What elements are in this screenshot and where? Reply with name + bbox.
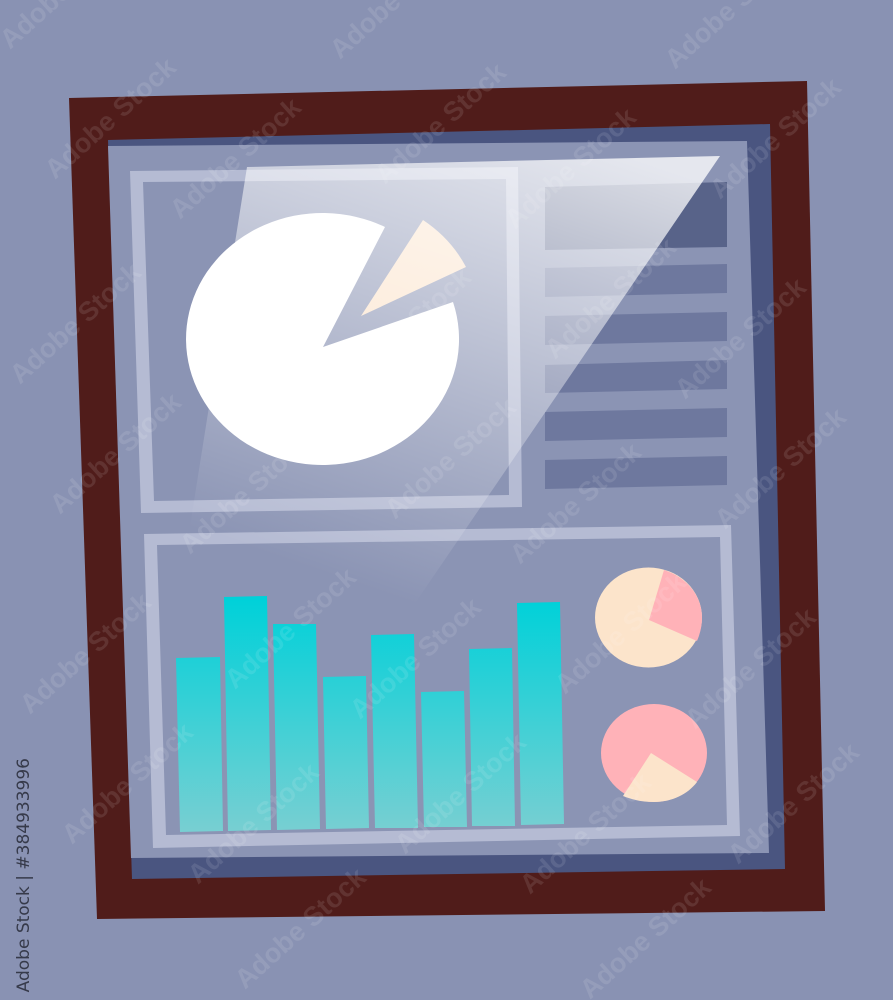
watermarks: Adobe Stock bbox=[549, 566, 692, 699]
watermarks: Adobe Stock bbox=[174, 426, 317, 559]
row 5 bbox=[545, 408, 727, 441]
watermarks: Adobe Stock bbox=[379, 391, 522, 524]
watermarks: Adobe Stock bbox=[504, 436, 647, 569]
watermarks: Adobe Stock bbox=[219, 561, 362, 694]
frame bbox=[69, 81, 825, 919]
watermarks: Adobe Stock bbox=[44, 386, 187, 519]
watermarks: Adobe Stock bbox=[499, 101, 642, 234]
watermarks: Adobe Stock bbox=[14, 586, 157, 719]
watermarks: Adobe Stock bbox=[369, 56, 512, 189]
bar chart bbox=[176, 596, 564, 832]
row 6 bbox=[545, 456, 727, 489]
watermarks: Adobe Stock bbox=[669, 271, 812, 404]
watermarks: Adobe Stock bbox=[4, 256, 147, 389]
watermarks: Adobe Stock bbox=[722, 736, 865, 869]
panel: pie chart bbox=[130, 167, 522, 513]
watermarks: Adobe Stock bbox=[679, 601, 822, 734]
watermarks: Adobe Stock bbox=[514, 766, 657, 899]
panel: bar chart and small pies bbox=[144, 525, 740, 848]
watermarks: Adobe Stock bbox=[164, 91, 307, 224]
watermarks: Adobe Stock bbox=[389, 726, 532, 859]
panel: list rows bbox=[545, 182, 727, 489]
glass reflection bbox=[172, 156, 720, 640]
board shadow bbox=[108, 124, 785, 879]
small pie chart: top bbox=[595, 568, 702, 668]
watermarks: Adobe Stock bbox=[344, 591, 487, 724]
large pie chart body bbox=[186, 213, 459, 465]
watermarks: Adobe Stock bbox=[334, 261, 477, 394]
row 3 bbox=[545, 312, 727, 345]
bottom panel border bbox=[144, 525, 740, 848]
watermarks: Adobe Stock bbox=[39, 51, 182, 184]
watermarks: Adobe Stock bbox=[56, 716, 199, 849]
watermarks: Adobe Stock bbox=[539, 231, 682, 364]
watermarks: Adobe Stock bbox=[704, 71, 847, 204]
small pie chart: bottom bbox=[601, 704, 707, 802]
watermarks: Adobe Stock bbox=[209, 221, 352, 354]
pie chart border bbox=[130, 167, 522, 513]
watermarks: Adobe Stock bbox=[709, 401, 852, 534]
row 1 bbox=[545, 182, 727, 250]
pie chart slice bbox=[361, 220, 466, 316]
row 2 bbox=[545, 264, 727, 297]
watermarks: Adobe Stock bbox=[229, 861, 372, 994]
stock id label: Adobe Stock | #384933996 bbox=[14, 758, 34, 992]
watermarks: Adobe Stock bbox=[182, 756, 325, 889]
board panel bbox=[108, 141, 769, 858]
row 4 bbox=[545, 360, 727, 393]
